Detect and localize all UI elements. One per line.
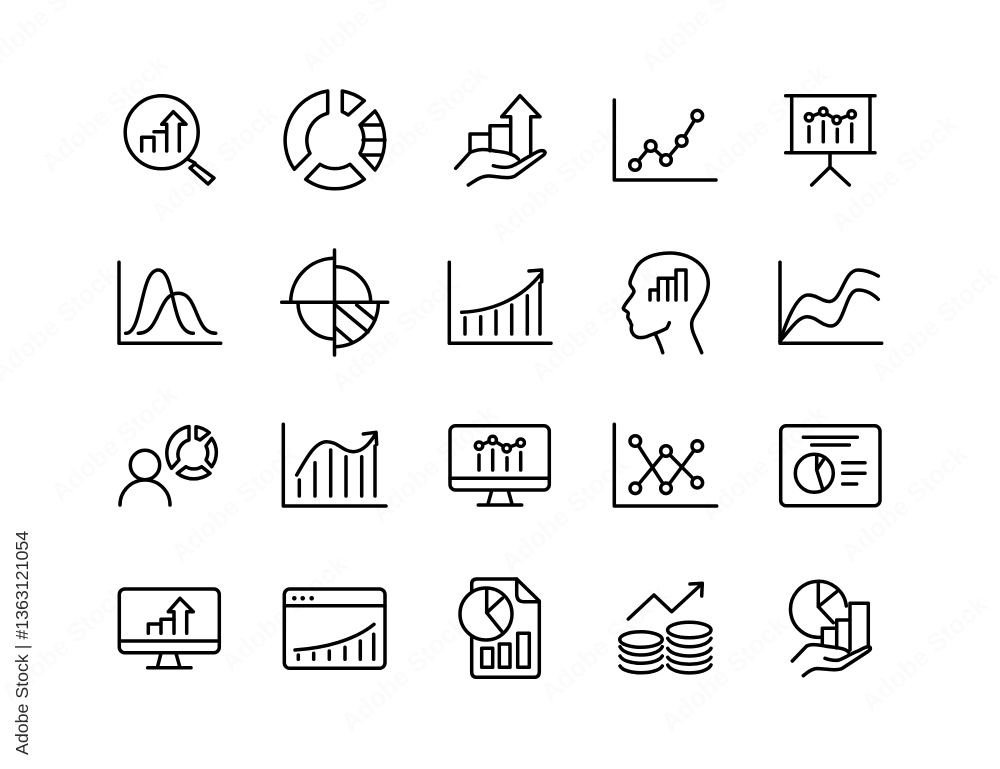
watermark pattern: Adobe Stock [855, 589, 993, 718]
icon: hand holding pie and bars [790, 581, 870, 676]
icon: magnifier over rising chart [125, 96, 214, 184]
icon: growth curve over bars [449, 262, 551, 343]
icon: quadrant crosshair chart [282, 250, 388, 355]
watermark pattern: Adobe Stock [355, 59, 493, 188]
watermark pattern: Adobe Stock [695, 59, 833, 188]
icon: crossing line chart [614, 424, 717, 506]
watermark pattern: Adobe Stock [145, 99, 283, 228]
watermark pattern: Adobe Stock [35, 49, 173, 178]
watermark pattern: Adobe Stock [695, 399, 833, 528]
icon: slide with pie chart and text lines [781, 426, 880, 506]
stock id vertical text: Adobe Stock | #1363121054 [12, 531, 32, 755]
watermark pattern: Adobe Stock [335, 609, 473, 738]
browser dots [292, 596, 314, 601]
icon: line chart with nodes [614, 100, 716, 180]
icon: document with pie and bars [460, 579, 539, 677]
icon: two line area trends [780, 262, 882, 343]
watermark pattern: Adobe Stock [485, 119, 623, 248]
icon: monitor with rising arrow chart [119, 589, 219, 668]
watermark pattern: Adobe Stock [535, 579, 673, 708]
watermark pattern: Adobe Stock [835, 439, 973, 568]
watermark pattern: Adobe Stock [865, 259, 1000, 388]
watermark pattern: Adobe Stock [45, 379, 183, 508]
icon: hand holding growth arrow [456, 96, 545, 185]
icon: head with bar chart [623, 253, 708, 353]
icon: monitor with dotted chart [450, 426, 549, 505]
watermark pattern: Adobe Stock [525, 259, 663, 388]
icon: wavy trend arrow over bars [283, 424, 386, 506]
icon: overlapping distribution curves [119, 262, 221, 343]
watermark pattern: Adobe Stock [495, 449, 633, 578]
icon: segmented donut chart [285, 91, 385, 189]
watermark pattern: Adobe Stock [165, 439, 303, 568]
icon: coin stacks with rising arrow [620, 583, 711, 673]
watermark pattern: Adobe Stock [825, 109, 963, 238]
icon: person with donut chart [120, 426, 216, 505]
watermark pattern: Adobe Stock [215, 549, 353, 678]
icon: presentation board [786, 96, 875, 185]
watermark pattern: Adobe Stock [655, 609, 793, 738]
watermark pattern: Adobe Stock [365, 399, 503, 528]
watermark pattern: Adobe Stock [325, 269, 463, 398]
icon: browser window with growth curve [284, 589, 385, 668]
